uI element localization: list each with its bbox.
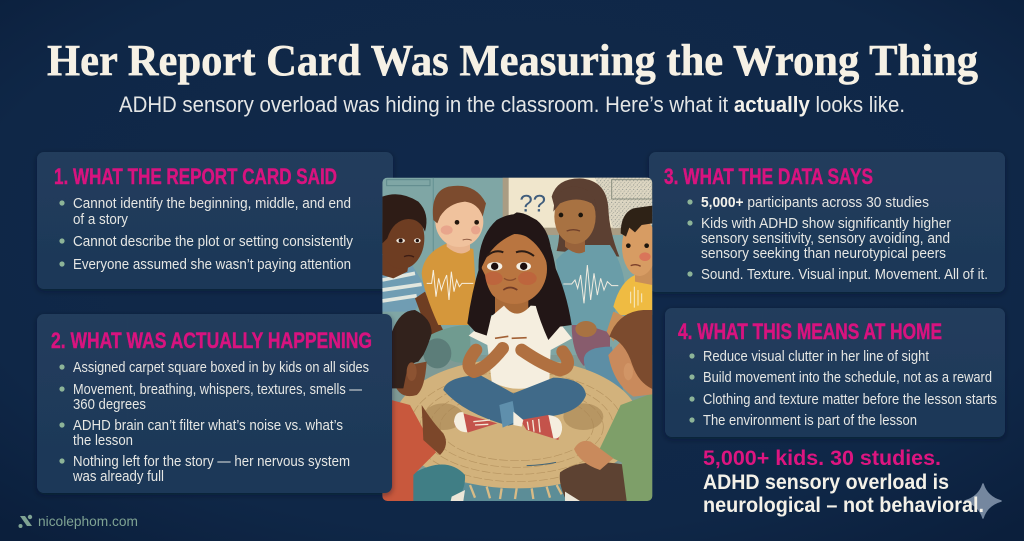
illustration: girl overwhelmed in a circle of classmates — [379, 178, 657, 502]
callout: key takeaway: ADHD sensory overload is — [703, 470, 949, 494]
bullet list: panel 2: Assigned carpet square boxed in by kids on all sides — [73, 359, 369, 376]
heading: panel 2: 2. WHAT WAS ACTUALLY HAPPENING — [51, 328, 372, 353]
whiteboard with question marks: ?? — [519, 191, 546, 218]
foreground child in green shirt — [560, 310, 652, 501]
panel: what the report card said — [37, 152, 393, 289]
bullet list: panel 2: ADHD brain can’t filter what’s noise vs. what’s — [73, 417, 343, 434]
bullet list: panel 1 — [59, 195, 353, 273]
bullet list: panel 3: Kids with ADHD show significantly higher — [701, 215, 951, 232]
bullet list: panel 2: Nothing left for the story — her nervous system — [73, 453, 350, 470]
bullet list: panel 3 — [687, 194, 988, 283]
sound wave: yellow shirt — [631, 287, 642, 308]
classmate: boy in striped shirt — [382, 194, 443, 334]
bullet list: panel 1: Cannot identify the beginning, middle, and end — [73, 195, 351, 212]
panel: what this means at home — [665, 308, 1005, 437]
heading: panel 3: 3. WHAT THE DATA SAYS — [664, 164, 873, 189]
callout: key takeaway: 5,000+ kids. 30 studies. — [703, 446, 941, 470]
central girl — [443, 212, 586, 440]
heading: panel 4: 4. WHAT THIS MEANS AT HOME — [678, 319, 942, 344]
bullet list: panel 2: 360 degrees — [73, 396, 146, 413]
icon: sparkle — [965, 484, 1001, 518]
wall — [382, 178, 652, 355]
brand url: nicolephom.com — [38, 513, 138, 529]
bullet list: panel 1: of a story — [73, 211, 128, 228]
sound wave: orange shirt — [427, 270, 473, 300]
bullet list: panel 3: 5,000+ participants across 30 studies — [701, 194, 929, 211]
bullet list: panel 3: Sound. Texture. Visual input. Movement. All of it. — [701, 266, 988, 283]
bullet list: panel 4: The environment is part of the lesson — [703, 412, 917, 429]
bullet list: panel 2 — [59, 359, 369, 485]
bullet list: panel 4: Reduce visual clutter in her line of sight — [703, 348, 930, 365]
whiteboard with question marks — [503, 178, 652, 235]
heading: panel 1: 1. WHAT THE REPORT CARD SAID — [54, 164, 337, 189]
panel: what was actually happening — [37, 314, 392, 493]
bullet list: panel 1: Cannot describe the plot or setting consistently — [73, 233, 353, 250]
icon: brand mark — [18, 515, 32, 528]
bullet list: panel 3: sensory sensitivity, sensory avoiding, and — [701, 230, 950, 247]
woven rug — [393, 358, 640, 502]
title: Her Report Card Was Measuring the Wrong Thing — [47, 36, 978, 85]
bullet list: panel 4 — [689, 348, 997, 429]
panel: what the data says — [649, 152, 1005, 292]
classmate: girl in teal sweater — [552, 178, 625, 366]
callout: key takeaway — [703, 446, 984, 517]
bullet list: panel 3: sensory seeking than neurotypical peers — [701, 245, 946, 262]
floor — [392, 355, 647, 484]
classmate: boy in yellow shirt — [584, 206, 657, 390]
bullet list: panel 2: the lesson — [73, 432, 133, 449]
bullet list: panel 2: was already full — [72, 468, 164, 485]
foreground child in red shirt — [382, 310, 465, 501]
bullet list: panel 1: Everyone assumed she wasn’t paying attention — [73, 256, 351, 273]
callout: key takeaway: neurological – not behavioral. — [703, 493, 984, 517]
classmate: boy in orange shirt — [422, 186, 486, 368]
footer brand — [18, 513, 138, 529]
subtitle: ADHD sensory overload was hiding in the classroom. Here’s what it actually looks like. — [119, 92, 905, 117]
bullet list: panel 2: Movement, breathing, whispers, textures, smells — — [73, 381, 362, 398]
sound wave: teal sweater — [563, 265, 618, 303]
